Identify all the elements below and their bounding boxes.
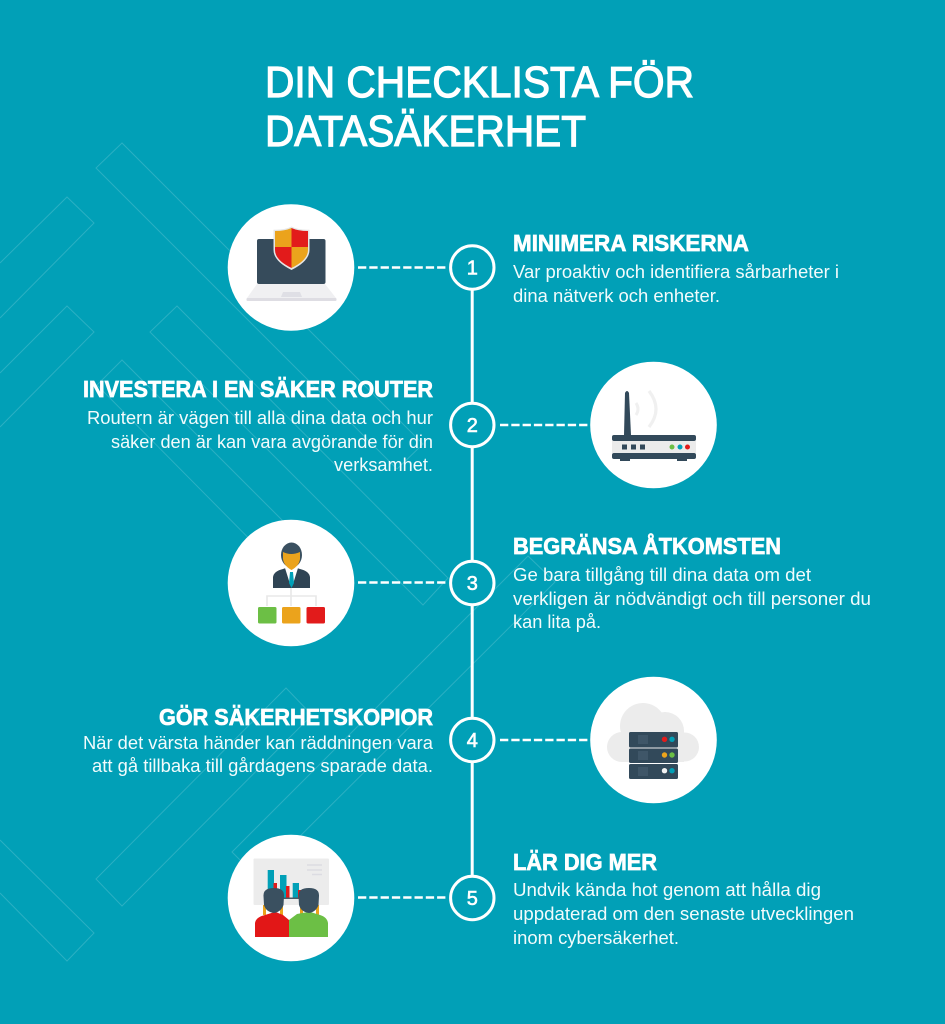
body text: Var proaktiv och identifiera sårbarheter i xyxy=(513,262,839,282)
body text: verksamhet. xyxy=(334,455,433,475)
body text: Ge bara tillgång till dina data om det xyxy=(513,565,811,585)
body text: säker den är kan vara avgörande för din xyxy=(111,432,433,452)
body text: När det värsta händer kan räddningen vara xyxy=(83,733,434,753)
body text xyxy=(87,408,433,475)
heading: GÖR SÄKERHETSKOPIOR xyxy=(159,704,433,730)
heading: INVESTERA I EN SÄKER ROUTER xyxy=(83,376,433,402)
number badge 1 xyxy=(451,246,494,289)
number badge 2 xyxy=(451,403,494,447)
number badge 3 xyxy=(451,561,494,605)
connector dashes xyxy=(358,581,447,584)
body text: Undvik kända hot genom att hålla dig xyxy=(513,880,821,900)
body text: uppdaterad om den senaste utvecklingen xyxy=(513,904,854,924)
body text xyxy=(83,733,434,776)
number badge 2: 2 xyxy=(467,415,478,437)
title xyxy=(265,58,694,156)
body text: inom cybersäkerhet. xyxy=(513,928,679,948)
connector dashes xyxy=(358,896,447,899)
icon: router xyxy=(590,362,717,488)
body text xyxy=(513,262,839,306)
number badge 4 xyxy=(451,718,494,762)
number badge 4: 4 xyxy=(467,730,478,752)
connector dashes xyxy=(500,424,589,426)
number badge 5 xyxy=(451,876,494,920)
body text: kan lita på. xyxy=(513,612,601,632)
title: DIN CHECKLISTA FÖR xyxy=(265,58,694,107)
body text: dina nätverk och enheter. xyxy=(513,286,720,306)
heading: MINIMERA RISKERNA xyxy=(513,230,749,256)
icon: cloud server xyxy=(590,677,717,803)
step 4 xyxy=(83,677,717,803)
step 1 xyxy=(228,204,839,331)
icon: manager with org chart xyxy=(228,520,354,646)
body text: verkligen är nödvändigt och till personer du xyxy=(513,589,871,609)
body text xyxy=(513,565,871,632)
step 5 xyxy=(228,835,854,961)
heading: LÄR DIG MER xyxy=(513,849,657,875)
heading: BEGRÄNSA ÅTKOMSTEN xyxy=(513,532,781,559)
body text: att gå tillbaka till gårdagens sparade data. xyxy=(92,756,433,776)
body text: Routern är vägen till alla dina data och hur xyxy=(87,408,433,428)
icon: two people viewing a chart xyxy=(228,835,354,961)
number badge 3: 3 xyxy=(467,573,478,595)
connector dashes xyxy=(358,266,447,269)
step 2 xyxy=(83,362,717,488)
timeline vertical line xyxy=(471,285,474,880)
icon: laptop with shield xyxy=(228,204,354,331)
title: DATASÄKERHET xyxy=(265,107,586,156)
step 3 xyxy=(228,520,871,646)
body text xyxy=(513,880,854,948)
connector dashes xyxy=(500,739,589,741)
number badge 5: 5 xyxy=(467,888,478,910)
number badge 1: 1 xyxy=(467,258,478,280)
